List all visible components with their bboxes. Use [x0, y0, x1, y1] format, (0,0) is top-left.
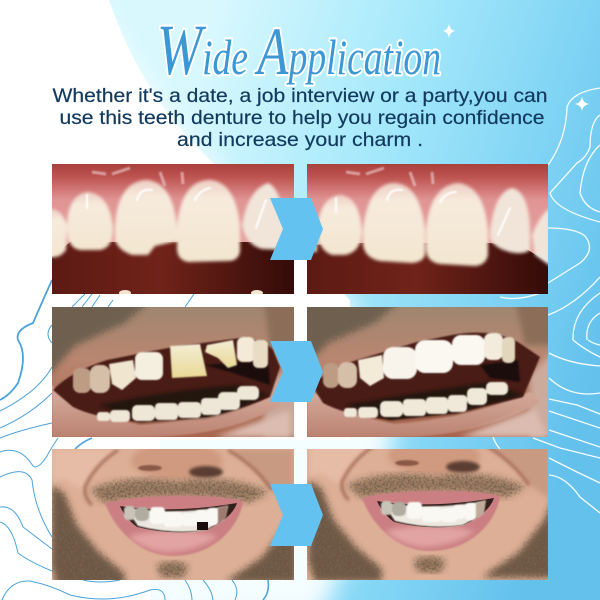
arrow: row 2: [270, 341, 323, 402]
title: Wide Application: [157, 10, 441, 90]
panel: yellow teeth before: [52, 307, 294, 437]
panel: chipped tooth after: [300, 164, 550, 294]
decorative white contour lines, right: [493, 88, 600, 513]
panel: chipped tooth before: [45, 164, 294, 296]
arrow: row 3: [270, 484, 323, 546]
panel: missing tooth after: [307, 449, 548, 580]
description text: Whether it's a date, a job interview or a party,you can: [52, 85, 548, 107]
decorative blue contour lines, left: [0, 280, 268, 600]
icon: right sparkle: [575, 97, 589, 111]
arrow: row 1: [270, 198, 323, 260]
description text: and increase your charm .: [177, 129, 423, 151]
description text: use this teeth denture to help you regain confidence: [60, 107, 544, 129]
panel: yellow teeth after: [307, 307, 548, 437]
icon: title sparkle: [443, 24, 455, 38]
panel: missing tooth before: [52, 449, 294, 580]
description text: [52, 85, 548, 151]
